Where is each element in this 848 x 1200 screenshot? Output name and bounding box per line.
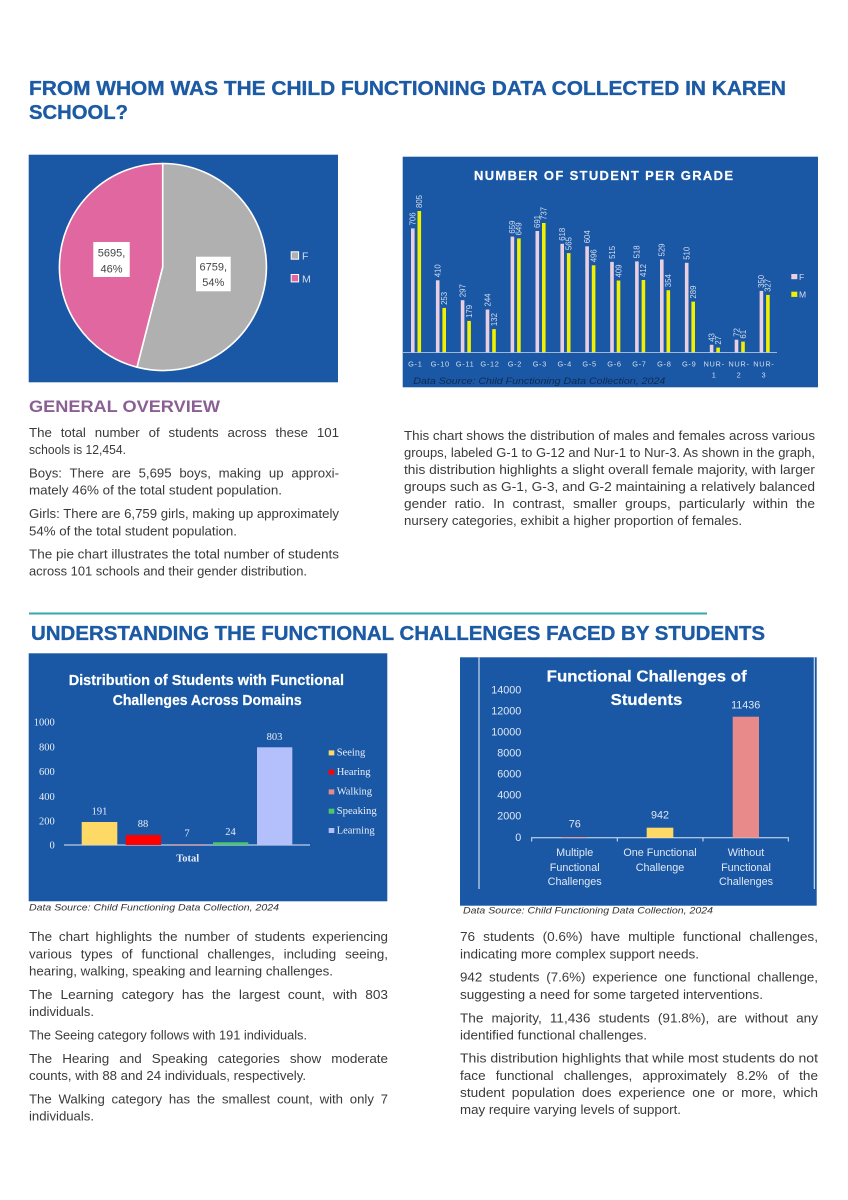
bars: NUR-3 <box>757 274 773 352</box>
x axis labels: NUR- <box>753 360 775 369</box>
data source: challenges chart: Data Source: Child Functioning Data Collection, 2024 <box>463 905 713 916</box>
category labels: One Functional <box>623 847 697 859</box>
legend: Walking <box>337 787 373 798</box>
bars: G-8: 354 <box>664 274 673 287</box>
text block: general overview: 54% of the total student population. <box>29 523 237 538</box>
y axis labels: 2000 <box>497 811 521 823</box>
bars: G-1: 706 <box>409 212 418 225</box>
bars: G-5 <box>583 230 598 352</box>
bars: G-12: 132 <box>490 313 499 326</box>
data source: domains chart: Data Source: Child Functioning Data Collection, 2024 <box>29 903 279 914</box>
bars: G-1 <box>409 194 424 352</box>
category labels: Challenge <box>636 862 684 874</box>
bars: G-11 <box>458 284 474 352</box>
category labels: Functional <box>550 862 600 874</box>
data label: F <box>196 257 231 291</box>
text block: general overview: Girls: There are 6,759 girls, making up approximately <box>29 506 340 521</box>
pie slice: F <box>137 163 266 370</box>
bars: G-7: 518 <box>633 245 642 258</box>
data label: M: 46% <box>100 264 123 276</box>
bars: G-3: 691 <box>533 215 542 228</box>
bars: G-4: 565 <box>565 236 574 250</box>
title: SCHOOL? <box>29 101 128 124</box>
bar: walking <box>169 843 205 846</box>
x axis labels: 3 <box>761 370 766 380</box>
panel: gender pie chart <box>29 155 338 382</box>
panel: challenges across domains bar chart <box>29 653 387 901</box>
chart title: Students <box>611 692 682 709</box>
text block: general overview: The pie chart illustrates the total number of students <box>29 547 339 562</box>
y axis labels: 600 <box>39 767 55 778</box>
legend: M <box>302 274 311 286</box>
y axis labels <box>34 718 55 852</box>
bars: G-2: 649 <box>515 222 524 235</box>
bars: NUR-1: 43 <box>707 333 716 342</box>
x axis labels: G-7 <box>632 360 647 369</box>
value labels: 76 <box>569 818 581 830</box>
text block: challenges chart description: face functional challenges, approximately 8.2% of the <box>460 1068 818 1083</box>
legend: Seeing <box>337 748 366 759</box>
y axis labels: 0 <box>49 841 55 852</box>
bars: G-2: 659 <box>508 221 517 234</box>
bar: without challenges <box>733 717 759 838</box>
bars: G-6 <box>608 245 623 352</box>
bars: G-4: 618 <box>558 228 567 241</box>
chart title <box>547 669 747 709</box>
chart title: Functional Challenges of <box>547 669 747 686</box>
text block: general overview <box>29 425 340 579</box>
x axis labels <box>408 360 775 380</box>
x axis labels: G-8 <box>657 360 672 369</box>
bars: G-7 <box>633 245 648 352</box>
bars: G-9: 289 <box>689 286 698 299</box>
bars: G-3: 737 <box>540 207 549 220</box>
bars: NUR-1 <box>707 333 723 352</box>
value labels: 191 <box>92 806 107 817</box>
legend: Learning <box>337 825 375 836</box>
value labels: 11436 <box>731 699 760 711</box>
text block: grade chart description <box>404 428 816 528</box>
heading: functional challenges: UNDERSTANDING THE FUNCTIONAL CHALLENGES FACED BY STUDENTS <box>31 622 765 645</box>
y axis labels: 400 <box>39 792 55 803</box>
bars: G-6: 515 <box>608 245 617 259</box>
bars: G-5: 496 <box>589 249 598 262</box>
category labels: Challenges <box>719 876 774 888</box>
category labels: Challenges <box>548 876 602 888</box>
bars: G-10: 253 <box>440 292 449 305</box>
bar: seeing <box>82 822 117 845</box>
value labels: 942 <box>651 810 669 822</box>
legend: F <box>302 250 308 262</box>
bar: one challenge <box>647 828 673 838</box>
bar: speaking <box>213 842 248 845</box>
text block: challenges chart description <box>460 929 819 1117</box>
legend <box>329 748 377 836</box>
bars: NUR-3: 350 <box>757 274 766 288</box>
legend <box>791 272 806 300</box>
text block: challenges chart description: suggesting a need for some targeted interventions. <box>460 987 763 1002</box>
data label: F: 54% <box>202 277 225 289</box>
value labels: 803 <box>267 732 282 743</box>
text block: challenges chart description: indicating more complex support needs. <box>460 946 699 961</box>
x axis labels: 2 <box>737 370 741 380</box>
y axis labels <box>491 684 521 844</box>
y axis labels: 6000 <box>497 769 521 781</box>
bars: G-1: 805 <box>415 194 424 208</box>
panel: functional challenges of students bar chart <box>460 657 817 906</box>
text block: challenges chart description: 942 students (7.6%) experience one functional challenge, <box>460 970 818 985</box>
text block: challenges chart description: may require varying levels of support. <box>460 1102 681 1117</box>
text block: domains chart description: The Seeing category follows with 191 individuals. <box>29 1027 307 1042</box>
section divider <box>29 612 707 614</box>
y axis labels: 12000 <box>491 705 521 717</box>
chart title: Distribution of Students with Functional <box>69 672 344 689</box>
pie slice: M <box>59 164 163 367</box>
x axis labels: G-10 <box>431 360 450 369</box>
x axis labels: G-2 <box>508 360 522 369</box>
legend: Speaking <box>337 806 377 817</box>
x axis labels: G-3 <box>533 360 547 369</box>
bars: G-10 <box>434 264 449 352</box>
bars: NUR-1: 27 <box>714 336 723 345</box>
y axis labels: 10000 <box>491 726 521 738</box>
category labels: Functional <box>721 862 771 874</box>
y axis labels: 800 <box>39 742 55 753</box>
bars: G-6: 409 <box>614 264 623 277</box>
bars: G-10: 410 <box>433 264 442 277</box>
title: FROM WHOM WAS THE CHILD FUNCTIONING DATA COLLECTED IN KAREN <box>29 77 786 100</box>
text block: domains chart description: The Hearing and Speaking categories show moderate <box>29 1051 388 1066</box>
y axis labels: 14000 <box>491 684 521 696</box>
text block: domains chart description: The chart highlights the number of students experiencing <box>29 929 388 944</box>
value labels: 7 <box>184 828 190 839</box>
bars: NUR-2: 72 <box>732 328 741 337</box>
bars: G-4 <box>558 228 574 352</box>
data label: M: 5695, <box>98 248 125 260</box>
text block: grade chart description: this distribution highlights a slight overall female majority, with larger <box>404 462 816 477</box>
x axis labels: G-12 <box>480 360 500 369</box>
bars: NUR-2 <box>732 328 748 352</box>
text block: challenges chart description: student population does experience one or more, which <box>460 1085 818 1100</box>
bars: G-11: 179 <box>465 305 474 318</box>
bars: G-8: 529 <box>658 243 667 256</box>
x axis labels: NUR- <box>728 360 750 369</box>
text block: grade chart description: gender ratio. In contrast, smaller groups, particularly within the <box>404 496 815 511</box>
text block: general overview: Boys: There are 5,695 boys, making up approxi- <box>29 465 339 480</box>
text block: general overview: schools is 12,454. <box>29 442 126 457</box>
chart title: NUMBER OF STUDENT PER GRADE <box>474 168 733 183</box>
data source: Data Source: Child Functioning Data Collection, 2024 <box>413 376 665 387</box>
text block: grade chart description: groups, labeled G-1 to G-12 and Nur-1 to Nur-3. As shown in the graph, <box>404 445 815 460</box>
text block: general overview: mately 46% of the total student population. <box>29 482 282 497</box>
value labels <box>92 732 282 839</box>
bar: multiple challenges <box>562 836 587 839</box>
legend: Hearing <box>337 767 371 778</box>
text block: domains chart description: hearing, walking, speaking and learning challenges. <box>29 963 333 978</box>
x axis labels: G-4 <box>557 360 572 369</box>
text block: general overview: The total number of students across these 101 <box>29 425 339 440</box>
x axis labels: NUR- <box>703 360 725 369</box>
x axis labels: G-6 <box>607 360 622 369</box>
category labels <box>548 847 774 888</box>
heading: general overview: GENERAL OVERVIEW <box>29 397 221 416</box>
text block: domains chart description <box>29 929 388 1124</box>
bars: G-11: 297 <box>458 284 467 297</box>
bars: G-12: 244 <box>483 293 492 306</box>
text block: domains chart description: various types of functional challenges, including seeing, <box>29 946 388 961</box>
value labels <box>569 699 760 830</box>
bar: learning <box>257 747 292 845</box>
bars: G-12 <box>483 293 499 352</box>
y axis labels: 200 <box>39 816 55 827</box>
y axis labels: 4000 <box>497 790 521 802</box>
legend: F <box>799 272 804 282</box>
bars: G-2 <box>508 221 524 352</box>
chart title <box>69 672 344 709</box>
x axis labels: G-1 <box>408 360 423 369</box>
bar: hearing <box>126 835 161 845</box>
text block: challenges chart description: identified functional challenges. <box>460 1027 647 1042</box>
bars: G-9: 510 <box>683 246 692 260</box>
y axis labels: 1000 <box>34 718 55 729</box>
title <box>29 77 786 124</box>
bars: G-7: 412 <box>639 264 648 277</box>
text block: domains chart description: individuals. <box>29 1004 94 1019</box>
x axis labels: G-5 <box>582 360 597 369</box>
data label: F: 6759, <box>200 262 227 274</box>
text block: challenges chart description: This distribution highlights that while most students do not <box>460 1051 818 1066</box>
data label: M <box>93 242 130 277</box>
text block: domains chart description: counts, with 88 and 24 individuals, respectively. <box>29 1068 306 1083</box>
text block: grade chart description: nursery categories, exhibit a higher proportion of females. <box>404 513 742 528</box>
bars: G-3 <box>533 207 549 352</box>
bars: G-5: 604 <box>583 230 592 243</box>
x axis label: Total <box>176 854 199 865</box>
x axis labels: 1 <box>712 370 717 380</box>
value labels: 88 <box>138 819 148 830</box>
y axis labels: 0 <box>515 832 521 844</box>
y axis labels: 8000 <box>497 747 521 759</box>
text block: general overview: across 101 schools and their gender distribution. <box>29 564 307 579</box>
text block: grade chart description: This chart shows the distribution of males and females across various <box>404 428 815 443</box>
text block: domains chart description: The Learning category has the largest count, with 803 <box>29 987 388 1002</box>
text block: challenges chart description: The majority, 11,436 students (91.8%), are without any <box>460 1010 819 1025</box>
value labels: 24 <box>225 827 236 838</box>
text block: domains chart description: The Walking category has the smallest count, with only 7 <box>29 1092 388 1107</box>
bars: G-8 <box>658 243 673 352</box>
bars: G-9 <box>682 246 698 352</box>
legend <box>291 250 311 286</box>
chart title: Challenges Across Domains <box>113 692 302 709</box>
x axis labels: G-11 <box>456 360 474 369</box>
category labels: Without <box>728 847 764 859</box>
legend: M <box>799 290 806 300</box>
panel: number of students per grade bar chart <box>403 157 818 387</box>
x axis labels: G-9 <box>682 360 696 369</box>
text block: domains chart description: individuals. <box>29 1109 94 1124</box>
bars: NUR-3: 327 <box>764 279 773 292</box>
category labels: Multiple <box>556 847 593 859</box>
text block: grade chart description: groups such as G-1, G-3, and G-2 maintaining a relatively balanced <box>404 479 815 494</box>
text block: challenges chart description: 76 students (0.6%) have multiple functional challenges, <box>460 929 818 944</box>
bars: NUR-2: 61 <box>739 330 748 339</box>
